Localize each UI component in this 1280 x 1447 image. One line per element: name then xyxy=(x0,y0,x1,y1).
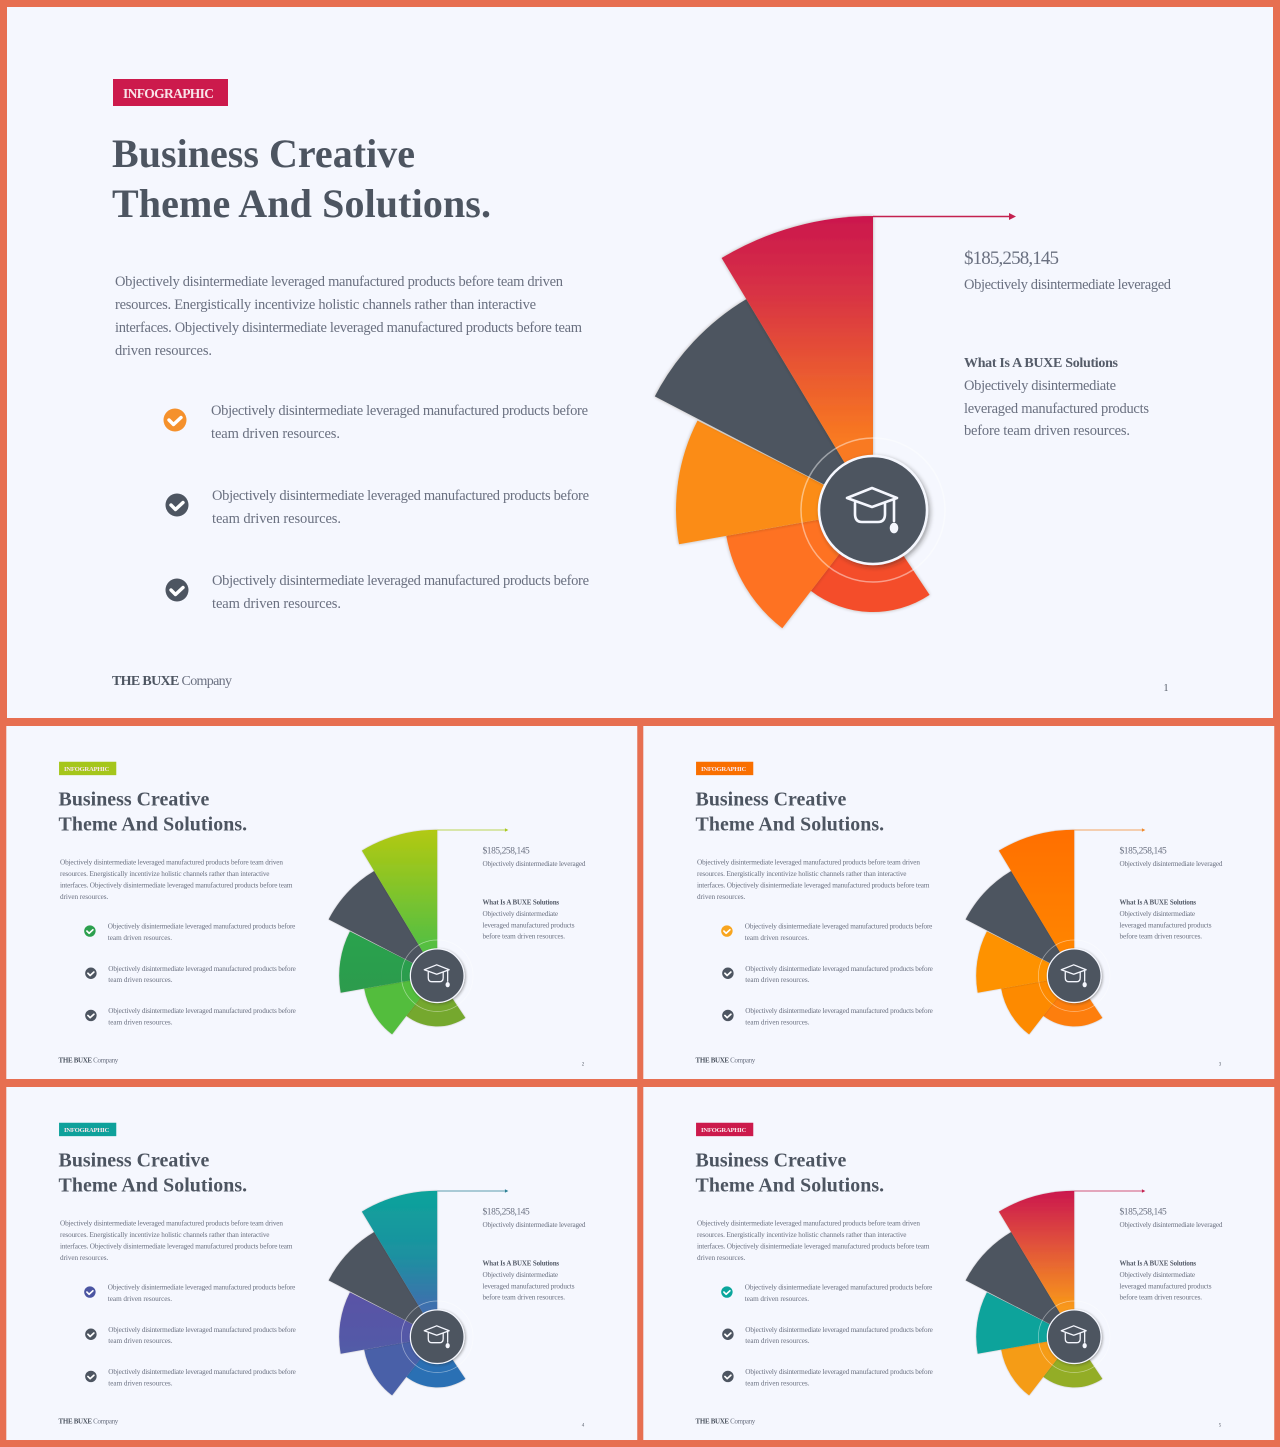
check item 3 xyxy=(166,573,589,612)
intro paragraph: interfaces. Objectively disintermediate leveraged manufactured products before team xyxy=(115,320,583,336)
solutions text block: before team driven resources. xyxy=(1120,1294,1202,1301)
check item 1: Objectively disintermediate leveraged manufactured products before xyxy=(108,923,295,931)
amount callout: $185,258,145 xyxy=(483,846,530,857)
heading: Business Creative xyxy=(59,1149,209,1171)
intro paragraph: interfaces. Objectively disintermediate leveraged manufactured products before team xyxy=(697,1242,930,1250)
check item 2: team driven resources. xyxy=(212,511,341,527)
check item 1: team driven resources. xyxy=(745,1295,809,1303)
solutions text block: before team driven resources. xyxy=(483,933,565,940)
arrow xyxy=(1074,1189,1145,1193)
icon: graduation cap xyxy=(1061,1326,1086,1348)
intro paragraph: resources. Energistically incentivize holistic channels rather than interactive xyxy=(60,1231,270,1239)
page number: 3 xyxy=(1219,1063,1222,1068)
check item 1: team driven resources. xyxy=(211,426,340,442)
badge: infographic: INFOGRAPHIC xyxy=(701,766,746,773)
check item 3: Objectively disintermediate leveraged manufactured products before xyxy=(745,1007,933,1015)
amount callout: Objectively disintermediate leveraged xyxy=(964,277,1172,293)
intro paragraph xyxy=(60,859,293,901)
solutions text block xyxy=(1120,1260,1212,1301)
check item 2: team driven resources. xyxy=(108,1337,173,1345)
intro paragraph: interfaces. Objectively disintermediate leveraged manufactured products before team xyxy=(697,881,930,889)
check item 3: team driven resources. xyxy=(745,1379,810,1387)
check item 1: team driven resources. xyxy=(108,934,172,942)
arrow xyxy=(437,828,508,832)
icon: graduation cap xyxy=(424,965,449,987)
heading xyxy=(59,788,247,835)
panel: crimson mixed slide xyxy=(643,1087,1274,1440)
fan chart xyxy=(966,830,1110,1034)
check item 1 xyxy=(84,1284,295,1303)
intro paragraph: driven resources. xyxy=(697,893,746,901)
fan chart xyxy=(655,216,945,628)
solutions text block: before team driven resources. xyxy=(483,1294,565,1301)
solutions text block: Objectively disintermediate xyxy=(1120,910,1195,918)
heading: Business Creative xyxy=(696,788,846,810)
solutions text block: Objectively disintermediate xyxy=(483,1271,558,1279)
check item 2 xyxy=(166,488,589,527)
intro paragraph: resources. Energistically incentivize holistic channels rather than interactive xyxy=(697,1231,907,1239)
badge: infographic xyxy=(59,762,116,775)
amount callout xyxy=(483,846,586,868)
intro paragraph: driven resources. xyxy=(60,1254,109,1262)
intro paragraph: resources. Energistically incentivize holistic channels rather than interactive xyxy=(60,870,270,878)
intro paragraph: Objectively disintermediate leveraged manufactured products before team driven xyxy=(60,1220,283,1228)
heading xyxy=(696,1149,884,1196)
check item 2: Objectively disintermediate leveraged manufactured products before xyxy=(745,965,933,973)
badge: infographic xyxy=(113,79,228,106)
intro paragraph: interfaces. Objectively disintermediate leveraged manufactured products before team xyxy=(60,881,293,889)
check item 2 xyxy=(85,1326,296,1345)
check item 3 xyxy=(85,1368,296,1387)
page number: 5 xyxy=(1219,1424,1222,1429)
icon: graduation cap xyxy=(1061,965,1086,987)
solutions text block: leveraged manufactured products xyxy=(483,1283,575,1291)
intro paragraph xyxy=(697,859,930,901)
solutions text block: What Is A BUXE Solutions xyxy=(1120,1260,1196,1268)
check item 1: Objectively disintermediate leveraged manufactured products before xyxy=(108,1284,295,1292)
badge: infographic xyxy=(696,762,753,775)
intro paragraph: Objectively disintermediate leveraged manufactured products before team driven xyxy=(60,859,283,867)
amount callout: $185,258,145 xyxy=(964,248,1059,269)
icon: graduation cap xyxy=(847,488,897,532)
check item 2: Objectively disintermediate leveraged manufactured products before xyxy=(212,488,589,504)
arrow xyxy=(873,213,1016,220)
panel: teal slide xyxy=(6,1087,637,1440)
intro paragraph: driven resources. xyxy=(60,893,109,901)
heading: Theme And Solutions. xyxy=(696,1174,884,1196)
check item 3 xyxy=(722,1368,933,1387)
check item 1 xyxy=(721,923,932,942)
amount callout xyxy=(1120,1207,1223,1229)
check item 1: team driven resources. xyxy=(108,1295,172,1303)
check item 3: team driven resources. xyxy=(212,596,341,612)
heading: Theme And Solutions. xyxy=(112,181,491,226)
check item 2: team driven resources. xyxy=(745,1337,810,1345)
intro paragraph: interfaces. Objectively disintermediate leveraged manufactured products before team xyxy=(60,1242,293,1250)
heading xyxy=(696,788,884,835)
heading xyxy=(59,1149,247,1196)
heading: Business Creative xyxy=(112,131,415,176)
fan chart xyxy=(329,830,473,1034)
solutions text block xyxy=(964,356,1149,439)
amount callout: Objectively disintermediate leveraged xyxy=(483,1221,586,1229)
solutions text block xyxy=(483,1260,575,1301)
check item 1: Objectively disintermediate leveraged manufactured products before xyxy=(211,403,588,419)
solutions text block: leveraged manufactured products xyxy=(1120,1283,1212,1291)
check item 3 xyxy=(85,1007,296,1026)
check item 3: Objectively disintermediate leveraged manufactured products before xyxy=(212,573,589,589)
heading: Business Creative xyxy=(59,788,209,810)
page number: 1 xyxy=(1164,683,1168,694)
check item 3: team driven resources. xyxy=(108,1018,173,1026)
solutions text block: What Is A BUXE Solutions xyxy=(483,899,559,907)
heading xyxy=(112,131,491,226)
solutions text block: Objectively disintermediate xyxy=(964,378,1116,394)
heading: Theme And Solutions. xyxy=(59,813,247,835)
panel: orange slide xyxy=(643,726,1274,1079)
badge: infographic: INFOGRAPHIC xyxy=(123,86,214,101)
badge: infographic: INFOGRAPHIC xyxy=(64,1127,109,1134)
solutions text block: before team driven resources. xyxy=(964,423,1130,439)
check item 2 xyxy=(722,965,933,984)
intro paragraph: driven resources. xyxy=(115,343,212,359)
page number: 2 xyxy=(582,1063,585,1068)
footer brand: THE BUXE Company xyxy=(696,1057,756,1065)
amount callout xyxy=(483,1207,586,1229)
check item 2: Objectively disintermediate leveraged manufactured products before xyxy=(108,965,296,973)
panel: main slide xyxy=(7,7,1273,718)
fan chart xyxy=(966,1191,1110,1395)
intro paragraph: resources. Energistically incentivize holistic channels rather than interactive xyxy=(115,297,536,313)
solutions text block: What Is A BUXE Solutions xyxy=(1120,899,1196,907)
heading: Theme And Solutions. xyxy=(59,1174,247,1196)
intro paragraph xyxy=(115,274,583,359)
check item 3: Objectively disintermediate leveraged manufactured products before xyxy=(108,1007,296,1015)
heading: Business Creative xyxy=(696,1149,846,1171)
badge: infographic xyxy=(696,1123,753,1136)
check item 3: Objectively disintermediate leveraged manufactured products before xyxy=(745,1368,933,1376)
solutions text block: Objectively disintermediate xyxy=(483,910,558,918)
solutions text block xyxy=(1120,899,1212,940)
check item 1 xyxy=(721,1284,932,1303)
check item 1: Objectively disintermediate leveraged manufactured products before xyxy=(745,923,932,931)
arrow xyxy=(1074,828,1145,832)
arrow xyxy=(437,1189,508,1193)
check item 2: Objectively disintermediate leveraged manufactured products before xyxy=(108,1326,296,1334)
intro paragraph: resources. Energistically incentivize holistic channels rather than interactive xyxy=(697,870,907,878)
intro paragraph xyxy=(60,1220,293,1262)
amount callout: $185,258,145 xyxy=(1120,846,1167,857)
check item 1: team driven resources. xyxy=(745,934,809,942)
solutions text block: leveraged manufactured products xyxy=(483,922,575,930)
check item 2: team driven resources. xyxy=(108,976,173,984)
intro paragraph: Objectively disintermediate leveraged manufactured products before team driven xyxy=(697,859,920,867)
check item 3: team driven resources. xyxy=(108,1379,173,1387)
intro paragraph xyxy=(697,1220,930,1262)
amount callout xyxy=(1120,846,1223,868)
heading: Theme And Solutions. xyxy=(696,813,884,835)
footer brand: THE BUXE Company xyxy=(696,1418,756,1426)
footer brand: THE BUXE Company xyxy=(59,1057,119,1065)
badge: infographic: INFOGRAPHIC xyxy=(64,766,109,773)
solutions text block: What Is A BUXE Solutions xyxy=(964,356,1119,371)
amount callout: Objectively disintermediate leveraged xyxy=(1120,860,1223,868)
amount callout: Objectively disintermediate leveraged xyxy=(483,860,586,868)
fan chart xyxy=(329,1191,473,1395)
amount callout: $185,258,145 xyxy=(483,1207,530,1218)
icon: graduation cap xyxy=(424,1326,449,1348)
check item 3: team driven resources. xyxy=(745,1018,810,1026)
solutions text block xyxy=(483,899,575,940)
solutions text block: Objectively disintermediate xyxy=(1120,1271,1195,1279)
intro paragraph: Objectively disintermediate leveraged manufactured products before team driven xyxy=(697,1220,920,1228)
check item 2: Objectively disintermediate leveraged manufactured products before xyxy=(745,1326,933,1334)
badge: infographic: INFOGRAPHIC xyxy=(701,1127,746,1134)
check item 1 xyxy=(164,403,588,442)
amount callout: $185,258,145 xyxy=(1120,1207,1167,1218)
footer brand: THE BUXE Company xyxy=(59,1418,119,1426)
check item 3: Objectively disintermediate leveraged manufactured products before xyxy=(108,1368,296,1376)
intro paragraph: driven resources. xyxy=(697,1254,746,1262)
amount callout xyxy=(964,248,1172,293)
check item 1: Objectively disintermediate leveraged manufactured products before xyxy=(745,1284,932,1292)
page number: 4 xyxy=(582,1424,585,1429)
panel: green slide xyxy=(6,726,637,1079)
check item 3 xyxy=(722,1007,933,1026)
badge: infographic xyxy=(59,1123,116,1136)
solutions text block: What Is A BUXE Solutions xyxy=(483,1260,559,1268)
intro paragraph: Objectively disintermediate leveraged manufactured products before team driven xyxy=(115,274,564,290)
check item 1 xyxy=(84,923,295,942)
solutions text block: leveraged manufactured products xyxy=(964,401,1149,417)
amount callout: Objectively disintermediate leveraged xyxy=(1120,1221,1223,1229)
check item 2: team driven resources. xyxy=(745,976,810,984)
solutions text block: leveraged manufactured products xyxy=(1120,922,1212,930)
check item 2 xyxy=(85,965,296,984)
footer brand: THE BUXE Company xyxy=(112,674,232,689)
check item 2 xyxy=(722,1326,933,1345)
solutions text block: before team driven resources. xyxy=(1120,933,1202,940)
